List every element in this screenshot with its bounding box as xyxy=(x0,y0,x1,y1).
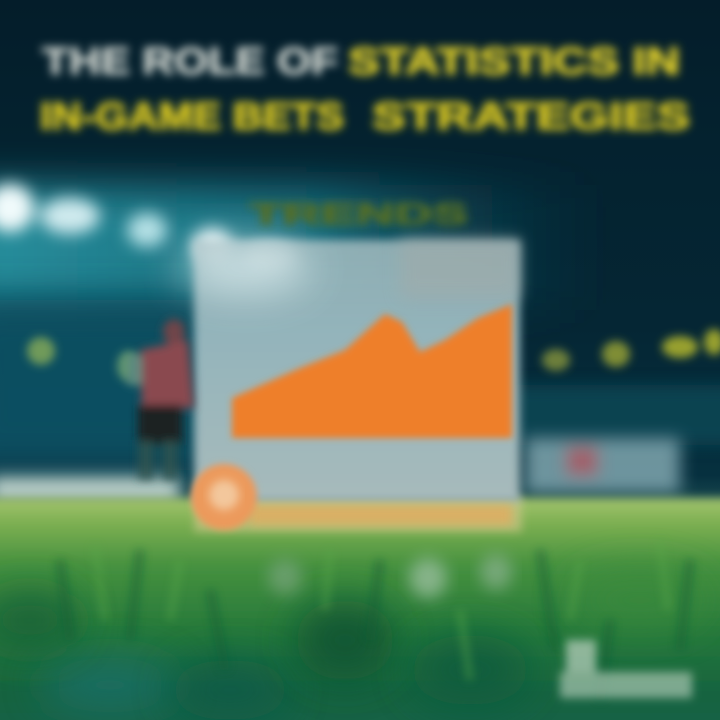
icon: orange circle badge xyxy=(191,464,257,530)
title: STATISTICS IN xyxy=(348,41,680,83)
chart heading: TRENDS xyxy=(250,198,468,231)
axis label band xyxy=(250,505,512,525)
title: STRATEGIES xyxy=(372,96,690,138)
white pitch line band xyxy=(0,476,180,504)
logo watermark xyxy=(560,640,692,698)
chart panel xyxy=(180,198,520,525)
title: THE ROLE OF xyxy=(42,41,338,83)
goal and distant figure xyxy=(525,438,680,493)
grass field xyxy=(0,498,720,720)
title: IN-GAME BETS xyxy=(40,96,344,138)
area chart xyxy=(232,304,512,438)
title xyxy=(40,41,690,138)
football player xyxy=(128,319,194,480)
stadium floodlights xyxy=(0,184,296,272)
distant yellow lights xyxy=(27,329,720,381)
